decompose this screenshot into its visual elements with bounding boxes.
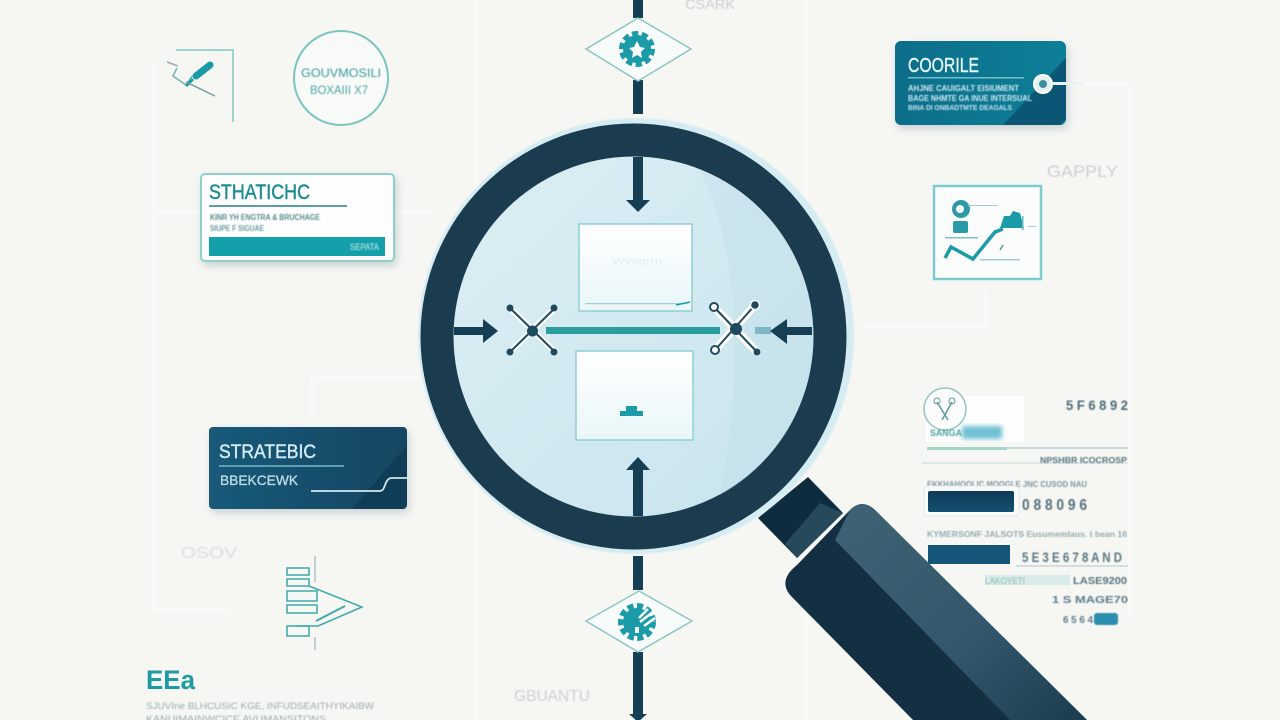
diamond icon: bottom gear <box>586 591 692 652</box>
diamond icon: top gear <box>586 18 691 81</box>
panel: teal cooperate card: COORILE <box>908 55 979 77</box>
node: right <box>710 300 760 356</box>
panel: light strategic card: KINR YH ENGTRA & BRUCHAGE <box>210 213 321 222</box>
panel: teal cooperate card: BINA DI ONBADTMTE DEAGALS <box>908 103 1012 112</box>
document: top: Wysgrm <box>612 256 662 266</box>
panel: right data table: EKKHAHOOLIC MOOGLE JNC CUSOD NAU <box>927 479 1087 489</box>
circle badge: GOUVMOSILI <box>301 66 381 80</box>
panel: right data table: 5 F 6 8 9 2 <box>1066 397 1128 413</box>
faint label: bottom: GBUANTU <box>514 688 590 705</box>
document: top <box>579 224 692 311</box>
panel: light strategic card <box>201 174 394 261</box>
arrow: bottom <box>626 457 650 516</box>
connector bar <box>546 327 720 334</box>
panel: navy strategic card <box>209 427 407 509</box>
top connector line <box>633 0 643 18</box>
circle badge <box>294 31 388 125</box>
faint label: right: GAPPLY <box>1047 162 1118 181</box>
panel: teal cooperate card: AHJNE CAUIGALT EISIUMENT <box>908 83 1020 93</box>
document: bottom <box>576 351 693 440</box>
panel: light strategic card: STHATICHC <box>209 181 310 204</box>
handle neck <box>758 477 843 558</box>
panel: right data table: 1 S MAGE70 <box>1052 595 1129 606</box>
arrow: left <box>454 319 498 343</box>
panel: teal cooperate card <box>895 41 1082 125</box>
dark ring <box>420 124 846 550</box>
icon: pen and check sticker <box>167 50 233 122</box>
panel: navy strategic card: BBEKCEWK <box>220 472 299 488</box>
handle grip <box>785 504 1087 720</box>
magnifying glass <box>418 118 1087 720</box>
bottom left text <box>146 701 375 720</box>
arrow: right <box>755 319 812 344</box>
bottom connector arrow <box>629 652 647 720</box>
panel: right data table: 0 8 8 0 9 6 <box>1022 497 1087 514</box>
panel: light strategic card: SEPATA <box>350 242 379 252</box>
lower connector line <box>633 556 643 590</box>
lens rim <box>418 118 854 554</box>
panel: right data table: SANGA <box>930 428 962 438</box>
panel: navy strategic card: STRATEBIC <box>219 442 316 463</box>
panel: right data table <box>922 388 1129 626</box>
panel: right data table: 6 5 6 4 <box>1063 615 1093 626</box>
circle badge: BOXAIII X7 <box>310 83 368 97</box>
faint label: left: OSOV <box>181 545 237 562</box>
panel: right data table: KYMERSONF JALSOTS Eusumemlaus. t bean 16 <box>927 529 1127 539</box>
panel: right data table: 5 E 3 E 6 7 8 A N D <box>1022 549 1122 565</box>
panel: right data table: LASE9200 <box>1073 576 1127 587</box>
bottom left text: SJUVIne BLHCUSIC KGE, INFUDSEAITHYIKAIBW <box>146 701 375 711</box>
panel: teal cooperate card: BAGE NHMTE GA INUE INTERSUAL <box>908 93 1032 103</box>
panel: right data table: LAKOYETI <box>985 576 1025 586</box>
arrow: top <box>626 157 650 212</box>
upper connector line <box>633 80 643 114</box>
panel: light strategic card: SIUPE F SIGUAE <box>210 224 265 233</box>
bottom left heading: EEa <box>146 665 196 695</box>
panel: chart box <box>934 186 1041 279</box>
icon: layered arrow diagram <box>287 556 362 650</box>
panel: right data table: NPSHBR ICOCROSP <box>1040 455 1127 465</box>
icon: nodes in circle <box>924 388 966 430</box>
lens glass <box>454 156 814 516</box>
node: left <box>506 304 558 356</box>
